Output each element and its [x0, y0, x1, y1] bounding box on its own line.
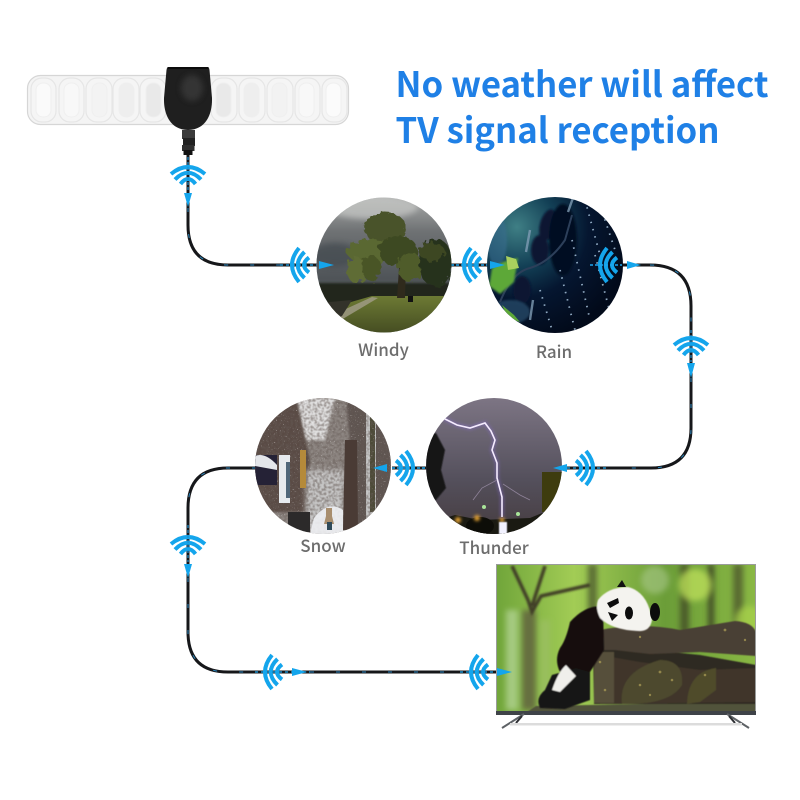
- title: No weather will affect: [396, 57, 769, 108]
- tv shadow: [510, 723, 742, 726]
- photo: windy: [311, 195, 453, 333]
- antenna panel: [28, 76, 348, 124]
- weather labels: Thunder: [459, 534, 529, 559]
- tv screen: [496, 564, 764, 712]
- signal icons and arrows: [171, 157, 708, 689]
- signal: bottom cable: [265, 655, 307, 689]
- photo: snow: [255, 398, 391, 534]
- cables: [188, 155, 691, 672]
- signal: right vertical: [674, 330, 708, 378]
- signal: left vertical: [171, 525, 205, 578]
- tv frame: [496, 564, 756, 712]
- tv stand: [502, 714, 749, 728]
- signal: windy to rain: [464, 248, 505, 282]
- signal: out of rain: [590, 248, 641, 282]
- photo: rain: [487, 195, 623, 333]
- weather labels: Rain: [536, 338, 572, 363]
- signal: thunder to snow: [373, 451, 413, 485]
- tv bottom bar: [496, 711, 756, 715]
- weather labels: [300, 336, 572, 559]
- title: TV signal reception: [396, 103, 720, 154]
- signal: antenna to windy: [171, 157, 205, 207]
- antenna: [28, 67, 348, 155]
- signal: into TV: [471, 655, 512, 689]
- title: [396, 57, 769, 154]
- photo: TV with panda: [496, 564, 764, 728]
- signal: into thunder: [553, 451, 593, 485]
- antenna connector: [182, 130, 195, 155]
- weather labels: Windy: [358, 336, 410, 361]
- bark highlights: [599, 629, 746, 696]
- weather labels: Snow: [300, 532, 346, 557]
- photo: thunder: [426, 398, 564, 536]
- antenna module: [164, 67, 212, 130]
- signal: into windy: [292, 248, 334, 282]
